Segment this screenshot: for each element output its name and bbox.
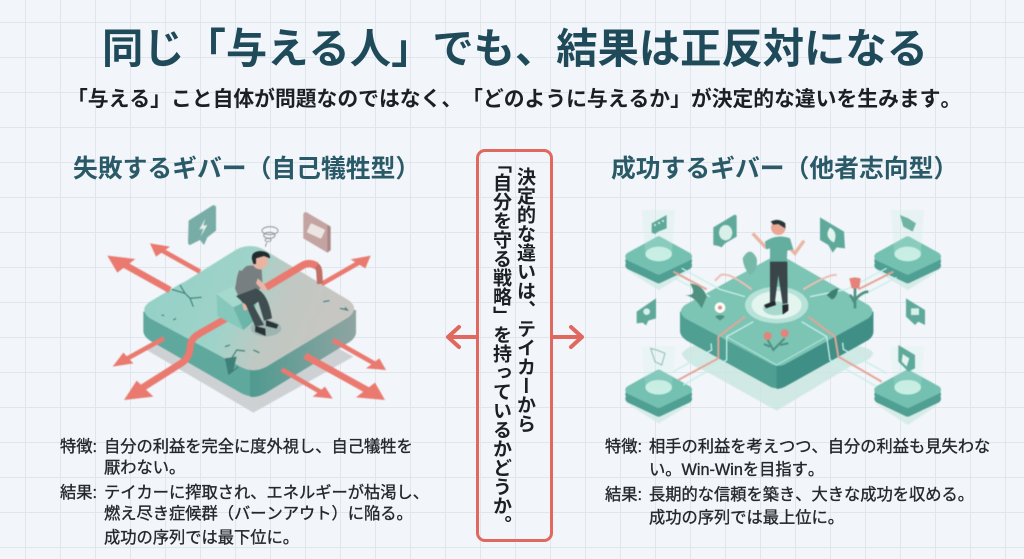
label: result: 結果: (605, 486, 642, 504)
center callout box (476, 149, 553, 542)
connector lines (673, 268, 897, 387)
label: feature: 特徴: (605, 438, 642, 456)
small platform bottom-left (630, 347, 688, 412)
cracks (162, 285, 347, 373)
small platform top-right (879, 210, 937, 279)
text: result: 長期的な信頼を築き、大きな成功を収める。 (649, 486, 974, 504)
small platform top-left (630, 210, 688, 279)
platform base (143, 246, 356, 397)
energy icon bubble (188, 205, 216, 245)
empty battery bubble (303, 212, 331, 253)
arrows radiating out (107, 243, 386, 400)
callout text: second column: 「自分を守る戦略」を持っているかどうか。 (490, 154, 511, 534)
label: feature: 特徴: (60, 438, 97, 456)
text block: failing giver: 厭わない。 (104, 459, 185, 477)
platform shadow (147, 300, 353, 413)
heading: failing giver: 失敗するギバー（自己犠牲型） (73, 156, 420, 183)
text: result: テイカーに搾取され、エネルギーが枯渇し、 (104, 484, 429, 502)
text: feature: 自分の利益を完全に度外視し、自己犠牲を (104, 438, 413, 456)
bubble icons (637, 215, 925, 372)
title: 同じ「与える人」でも、結果は正反対になる (102, 26, 928, 72)
text: feature: 相手の利益を考えつつ、自分の利益も見失わな (649, 438, 990, 456)
small platform shadows (627, 270, 940, 425)
heading: successful giver: 成功するギバー（他者志向型） (611, 156, 958, 183)
standing person (753, 220, 804, 315)
exhausted person sitting on block (217, 251, 281, 336)
plants and flowers (685, 252, 868, 350)
central hub platform (680, 256, 873, 389)
soft shadow under hub (682, 345, 873, 411)
text block: failing giver (60, 438, 429, 547)
text block: successful giver: い。Win-Winを目指す。 (649, 461, 824, 479)
right arrow (553, 327, 582, 347)
left arrow (448, 327, 476, 347)
label: result: 結果: (60, 484, 97, 502)
text block: successful giver: 成功の序列では最上位に。 (649, 509, 844, 527)
text block: failing giver: 燃え尽き症候群（バーンアウト）に陥る。 (104, 505, 413, 523)
text block: failing giver: 成功の序列では最下位に。 (104, 529, 299, 547)
callout text: first column: 決定的な違いは、テイカーから (514, 167, 535, 433)
text block: successful giver (605, 438, 990, 527)
back ribbon (266, 264, 320, 287)
subtitle: 「与える」こと自体が問題なのではなく、「どのように与えるか」が決定的な違いを生みます。 (67, 88, 961, 111)
small platform bottom-right (879, 347, 937, 412)
dizzy swirl (262, 227, 278, 247)
